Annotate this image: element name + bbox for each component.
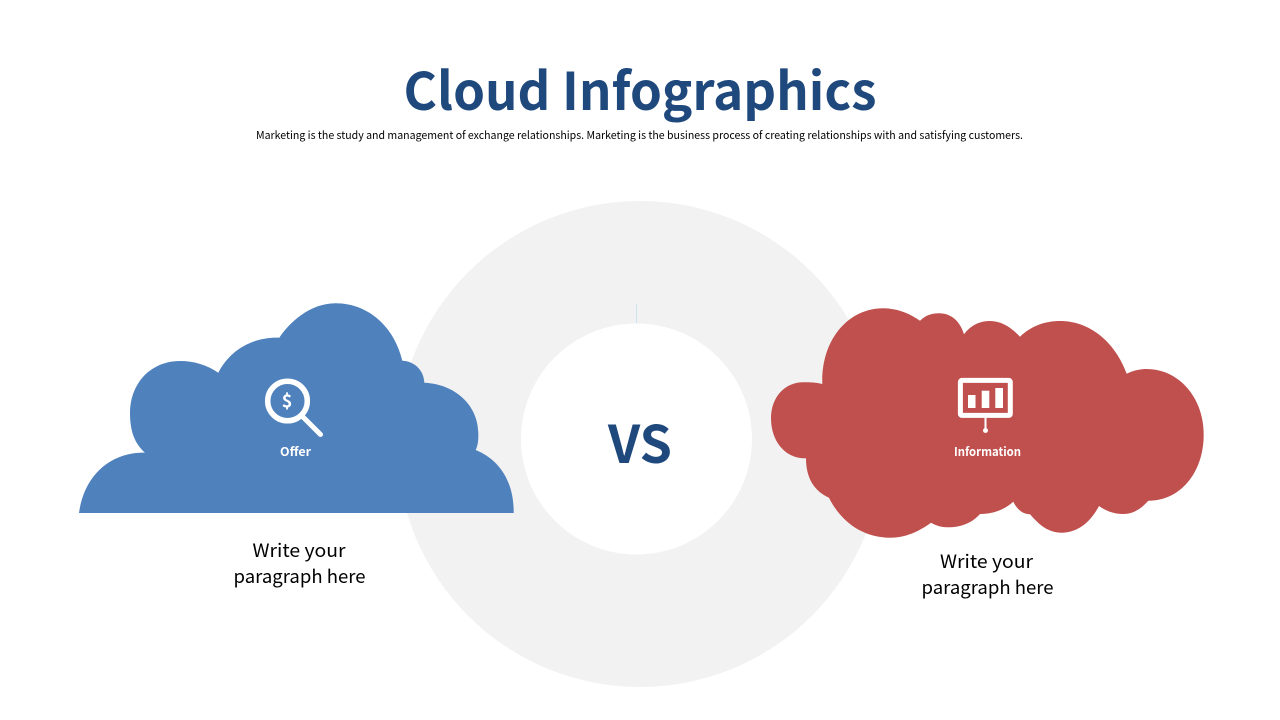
blue cloud shape [79, 303, 514, 513]
tick mark [636, 304, 638, 323]
subtitle text: Marketing is the study and management of exchange relationships. Marketing is the business process of creating relationships with and satisfying customers. [256, 127, 1023, 143]
label: Information: Information [954, 443, 1021, 460]
background ring [397, 201, 883, 687]
icon: magnifier with dollar: $ [282, 388, 292, 414]
label: Offer: Offer [280, 443, 312, 460]
paragraph: Offer [234, 537, 366, 589]
panel: Offer cloud [79, 303, 514, 513]
paragraph: Offer: Write your [252, 537, 346, 563]
icon: presentation board with bars [960, 380, 1010, 433]
inner white circle [521, 324, 752, 554]
central graphic: ring and VS [397, 201, 883, 687]
panel: Information cloud [771, 308, 1204, 538]
icon: magnifier with dollar [268, 381, 320, 434]
red cloud shape [771, 308, 1204, 538]
paragraph: Information [922, 548, 1054, 600]
paragraph: Information: Write your [940, 548, 1034, 574]
title: Cloud Infographics [404, 50, 876, 125]
paragraph: Information: paragraph here [922, 574, 1054, 600]
paragraph: Offer: paragraph here [234, 563, 366, 589]
VS label: VS [607, 403, 672, 478]
